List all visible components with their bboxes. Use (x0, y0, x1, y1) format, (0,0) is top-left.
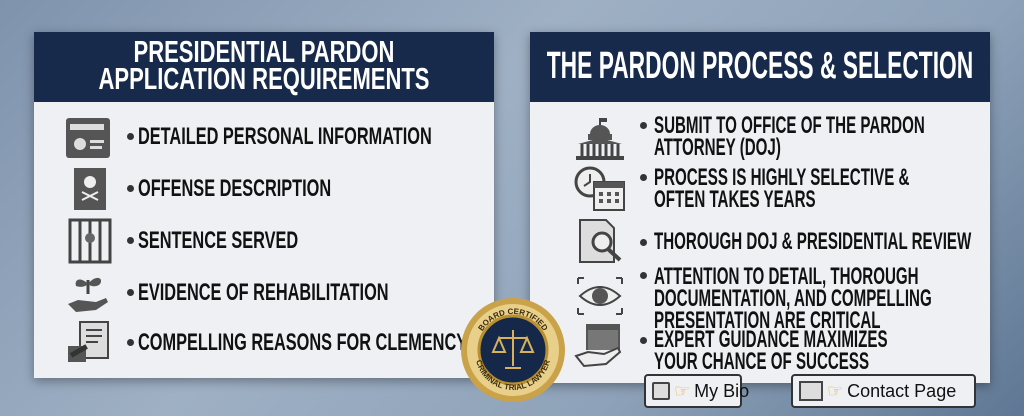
item: review (579, 219, 972, 263)
button: my bio (644, 374, 742, 408)
item: rehabilitation (68, 278, 389, 312)
item: selective: OFTEN TAKES YEARS (654, 186, 816, 213)
item: personal information (66, 118, 432, 158)
item: selective (574, 164, 909, 213)
item: personal information: DETAILED PERSONAL INFORMATION (138, 123, 432, 150)
icon: jail bars (68, 218, 112, 264)
icon: gavel document (68, 321, 109, 362)
item: submit: ATTORNEY (DOJ) (654, 134, 781, 161)
button: contact page: Contact Page (847, 380, 956, 400)
item: submit (576, 112, 925, 161)
icon: hand folder (574, 324, 622, 367)
item: selective: PROCESS IS HIGHLY SELECTIVE & (654, 164, 909, 191)
item: review: THOROUGH DOJ & PRESIDENTIAL REVIEW (654, 228, 971, 255)
icon: board certified badge (461, 298, 565, 402)
panel: application requirements (34, 32, 494, 378)
item: sentence served: SENTENCE SERVED (138, 227, 298, 254)
icon: document skull (74, 168, 106, 210)
heading: requirements: APPLICATION REQUIREMENTS (99, 61, 429, 96)
icon: magnifier document (579, 219, 622, 263)
item: offense description: OFFENSE DESCRIPTION (138, 175, 331, 202)
item: submit: SUBMIT TO OFFICE OF THE PARDON (654, 112, 925, 139)
button: my bio: My Bio (694, 380, 749, 400)
icon: hand plant (68, 278, 108, 312)
item: expert guidance: YOUR CHANCE OF SUCCESS (654, 348, 869, 375)
item: attention to detail (577, 263, 932, 334)
item: sentence served (68, 218, 298, 264)
item: compelling reasons: COMPELLING REASONS FOR CLEMENCY (138, 329, 467, 356)
icon: capitol (576, 118, 624, 160)
button: my bio: ☞ (674, 380, 690, 400)
item: compelling reasons (68, 321, 467, 362)
button: contact page (791, 374, 976, 408)
icon: board certified badge: BOARD CERTIFIED (478, 308, 548, 331)
item: expert guidance (574, 324, 888, 375)
item: attention to detail: PRESENTATION ARE CRITICAL (654, 307, 881, 334)
heading: requirements: PRESIDENTIAL PARDON (134, 34, 394, 69)
button: contact page: ☞ (827, 380, 843, 400)
icon: eye (577, 277, 623, 315)
icon: folder id (66, 118, 110, 158)
item: offense description (74, 168, 331, 210)
item: attention to detail: ATTENTION TO DETAIL, THOROUGH (654, 263, 919, 290)
heading: requirements (34, 32, 494, 102)
heading: process (530, 32, 990, 102)
item: attention to detail: DOCUMENTATION, AND COMPELLING (654, 285, 932, 312)
panel: pardon process (530, 32, 990, 383)
item: expert guidance: EXPERT GUIDANCE MAXIMIZES (654, 326, 888, 353)
item: rehabilitation: EVIDENCE OF REHABILITATION (138, 279, 389, 306)
heading: process: THE PARDON PROCESS & SELECTION (547, 45, 973, 87)
icon: clock calendar (574, 166, 625, 211)
icon: board certified badge: CRIMINAL TRIAL LAWYER (476, 360, 550, 390)
